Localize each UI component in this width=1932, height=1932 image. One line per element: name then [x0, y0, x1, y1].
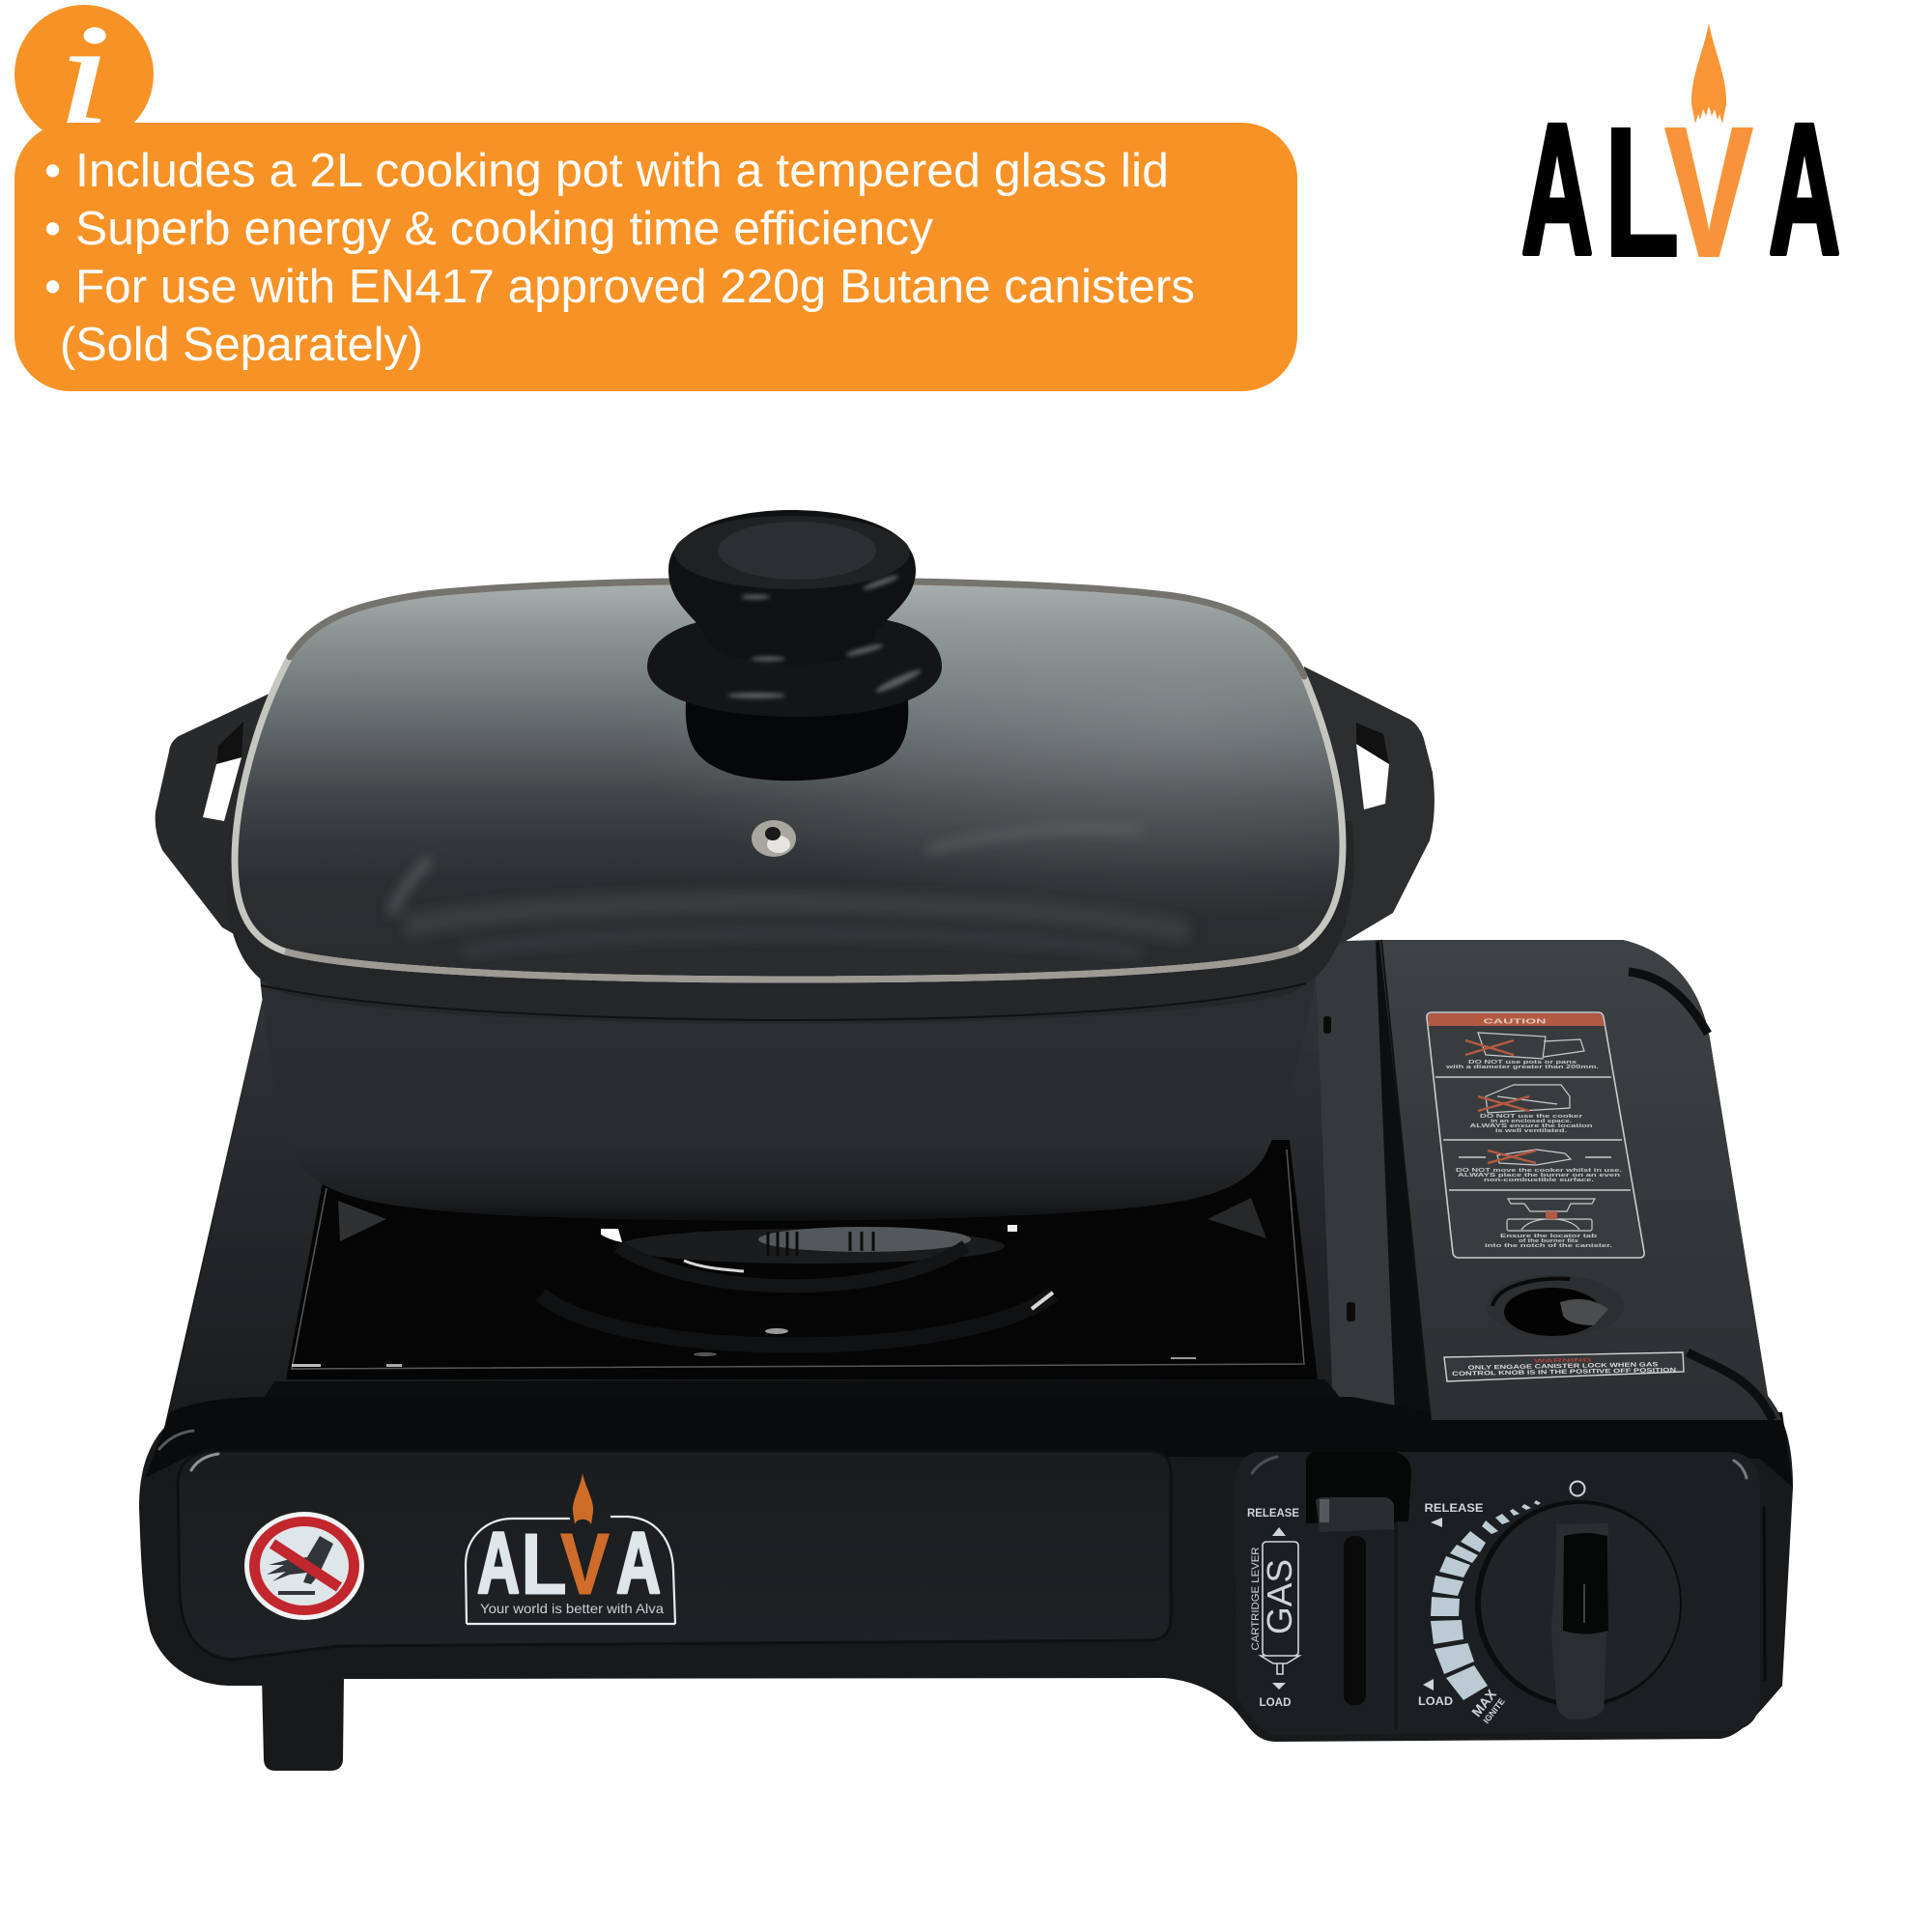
- pot handles: [156, 667, 1435, 966]
- warning label: [1444, 1352, 1684, 1381]
- caution pictogram: locator tab: [1507, 1199, 1595, 1231]
- brand badge: L: [521, 1517, 567, 1613]
- stove top surface: [170, 940, 1420, 1412]
- caution label: DO NOT use the cooker: [1480, 1114, 1582, 1120]
- feature list: [44, 145, 1195, 371]
- brand badge: A: [477, 1516, 520, 1612]
- cooking pot: [156, 510, 1435, 1221]
- gas cartridge markings: CARTRIDGE LEVER: [1250, 1547, 1262, 1650]
- gas cartridge markings: GAS: [1260, 1559, 1299, 1634]
- no-touch warning sticker: [244, 1512, 364, 1620]
- feature list: •: [44, 203, 61, 255]
- caution label: DO NOT move the cooker whilst in use.: [1456, 1168, 1623, 1174]
- gas lever slot: [1344, 1536, 1366, 1705]
- knob highlights: [727, 573, 923, 698]
- caution pictogram: do not move: [1459, 1150, 1611, 1165]
- wordmark: A: [1769, 85, 1840, 293]
- knob head: [668, 510, 916, 665]
- burner pit: [253, 1140, 1352, 1415]
- steam vent: [752, 820, 796, 857]
- wordmark: L: [1604, 88, 1680, 296]
- front lip shadow: [145, 1397, 1793, 1488]
- glass lid: [235, 581, 1343, 980]
- pot body: [259, 956, 1319, 1221]
- panel: features: [14, 0, 1297, 391]
- caution label: with a diameter greater than 200mm.: [1444, 1065, 1600, 1070]
- gas control markings: RELEASE: [1424, 1501, 1484, 1515]
- feature list: Superb energy & cooking time efficiency: [75, 203, 933, 255]
- warning label: CONTROL KNOB IS IN THE POSITIVE OFF POSITION: [1452, 1367, 1677, 1378]
- feature list: For use with EN417 approved 220g Butane canisters: [75, 261, 1195, 313]
- brand badge: A: [616, 1516, 661, 1612]
- stove body: [139, 940, 1793, 1742]
- caution pictogram: enclosed space: [1478, 1085, 1570, 1113]
- front panel recess: [159, 1431, 1171, 1660]
- canister lock: [1487, 1275, 1624, 1337]
- lid reflections: [391, 829, 1188, 952]
- gas control knob: [1475, 1500, 1682, 1719]
- gas control markings: [1418, 1482, 1584, 1725]
- brand badge: V: [560, 1517, 610, 1613]
- caution label: CAUTION: [1484, 1016, 1546, 1026]
- icon: info circle: [14, 0, 154, 155]
- brand badge: Your world is better with Alva: [480, 1601, 664, 1616]
- icon: hand: [267, 1536, 333, 1584]
- caution label: is well ventilated.: [1495, 1128, 1568, 1134]
- lid knob: [647, 510, 942, 781]
- gas control markings: LOAD: [1418, 1694, 1453, 1708]
- caution label: in an enclosed space.: [1491, 1119, 1573, 1124]
- stove foot: [262, 1676, 344, 1771]
- caution label: Ensure the locator tab: [1500, 1234, 1597, 1239]
- gas cartridge markings: [1247, 1508, 1299, 1709]
- icon: info circle: i: [57, 0, 111, 155]
- icon: flame: [1691, 23, 1726, 124]
- centre column: [1315, 940, 1432, 1415]
- gas cartridge markings: RELEASE: [1247, 1508, 1299, 1520]
- control panel: [1235, 1452, 1765, 1735]
- warning label: WARNING: [1534, 1357, 1592, 1365]
- icon: badge flame: [573, 1473, 593, 1524]
- wordmark: V: [1664, 88, 1753, 296]
- gas control markings: MAX: [1468, 1686, 1499, 1719]
- lid stainless rim: [235, 581, 1343, 980]
- brand badge: [466, 1473, 675, 1624]
- gas lever handle: [1306, 1452, 1411, 1532]
- knob flange: [647, 618, 942, 717]
- logo: Alva: [1521, 23, 1840, 296]
- feature list: •: [44, 261, 61, 313]
- feature list: (Sold Separately): [60, 319, 423, 371]
- gas control markings: IGNITE: [1481, 1696, 1507, 1725]
- caution label: into the notch of the canister.: [1485, 1243, 1613, 1249]
- caution label: of the burner fits: [1519, 1238, 1578, 1244]
- caution label: non-combustible surface.: [1484, 1178, 1595, 1183]
- feature list: Includes a 2L cooking pot with a tempered glass lid: [75, 145, 1169, 197]
- flame level scale: [1431, 1500, 1541, 1700]
- caution label: [1427, 1012, 1644, 1258]
- feature list: •: [44, 145, 61, 197]
- caution pictogram: pot too large: [1465, 1033, 1584, 1059]
- warning label: ONLY ENGAGE CANISTER LOCK WHEN GAS: [1467, 1361, 1659, 1372]
- pot rim band: [224, 821, 1354, 1024]
- wordmark: [1521, 85, 1840, 296]
- cartridge lid: [1379, 940, 1782, 1420]
- caution label: DO NOT use pots or pans: [1468, 1060, 1577, 1065]
- panel background: [14, 123, 1297, 391]
- knob reflection: [686, 700, 908, 781]
- caution label: ALWAYS place the burner on an even: [1458, 1173, 1620, 1179]
- caution label: ALWAYS ensure the location: [1470, 1123, 1592, 1129]
- wordmark: A: [1521, 85, 1593, 293]
- stove: [139, 510, 1793, 1771]
- gas cartridge markings: LOAD: [1260, 1697, 1291, 1709]
